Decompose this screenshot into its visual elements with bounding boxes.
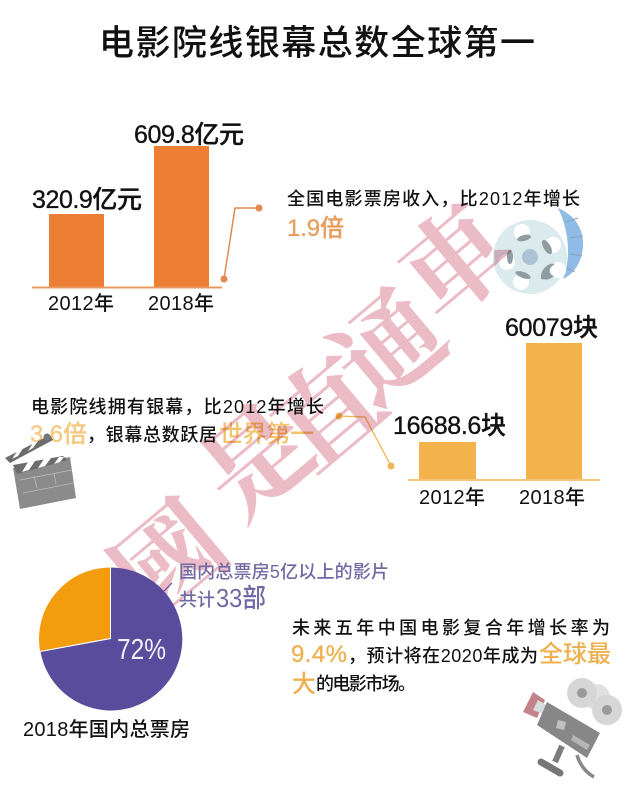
text block: revenue growth	[287, 188, 580, 242]
pie slice: remainder	[39, 568, 110, 651]
text block: future growth: ，预计将在2020年成为	[348, 646, 538, 666]
axis label: 2018: 2018年	[148, 292, 214, 315]
text block: screens growth: ，银幕总数跃居	[87, 425, 217, 445]
bar chart: cinema screens	[393, 314, 600, 509]
value label: 2012 revenue: 320.9亿元	[32, 186, 142, 214]
watermark: 是	[162, 362, 341, 546]
text block: future growth: 9.4%	[291, 641, 347, 668]
text block: revenue growth: 全国电影票房收入，比2012年增长	[287, 188, 580, 209]
value label: 2018 screens: 60079块	[505, 314, 598, 342]
bar: 2018 revenue	[154, 146, 209, 287]
text block: films over 500 million	[164, 562, 389, 613]
bar: 2012 revenue	[49, 214, 104, 287]
text block: screens growth: 世界第一	[219, 421, 314, 448]
text block: films over 500 million: 33部	[216, 583, 266, 613]
icon: clapperboard	[5, 434, 76, 509]
axis label: 2018: 2018年	[519, 486, 585, 509]
watermark: 通	[295, 249, 474, 433]
icon: film reel	[493, 208, 583, 294]
text block: future growth: 全球最	[539, 641, 611, 668]
text block: screens growth: 3.6倍	[30, 421, 87, 448]
value label: 2012 screens: 16688.6块	[393, 412, 506, 440]
bar: 2018 screens	[526, 343, 582, 479]
bar chart: box office revenue	[32, 121, 244, 315]
title: 电影院线银幕总数全球第一	[99, 24, 535, 63]
chart baseline	[32, 286, 222, 288]
pie slice: 72%	[40, 568, 182, 710]
pie percentage label: 72%	[117, 634, 166, 666]
text block: screens growth: 电影院线拥有银幕，比2012年增长	[31, 397, 324, 417]
value label: 2018 revenue: 609.8亿元	[134, 121, 244, 149]
text block: future growth: 未来五年中国电影复合年增长率为	[292, 618, 610, 638]
icon: film camera	[523, 678, 622, 777]
watermark	[75, 164, 541, 646]
text block: films over 500 million: 共计	[179, 590, 215, 610]
bar: 2012 screens	[419, 442, 476, 479]
text block: future growth	[291, 618, 611, 698]
text block: films over 500 million: 国内总票房5亿以上的影片	[179, 562, 389, 582]
connector: screens callout	[336, 412, 394, 470]
chart baseline	[408, 479, 600, 481]
text block: revenue growth: 1.9倍	[287, 215, 344, 242]
axis label: 2012: 2012年	[48, 292, 114, 315]
pie caption: 2018年国内总票房	[23, 718, 190, 741]
connector: revenue callout	[220, 204, 262, 282]
watermark: 直	[233, 315, 412, 499]
pie chart: 2018 domestic box office	[39, 568, 182, 710]
watermark: 國	[75, 462, 254, 646]
text block: future growth: 的电影市场。	[316, 674, 416, 694]
text block: screens growth	[30, 397, 324, 448]
watermark: 車	[362, 164, 541, 348]
text block: future growth: 大	[292, 671, 316, 698]
axis label: 2012: 2012年	[419, 486, 485, 509]
